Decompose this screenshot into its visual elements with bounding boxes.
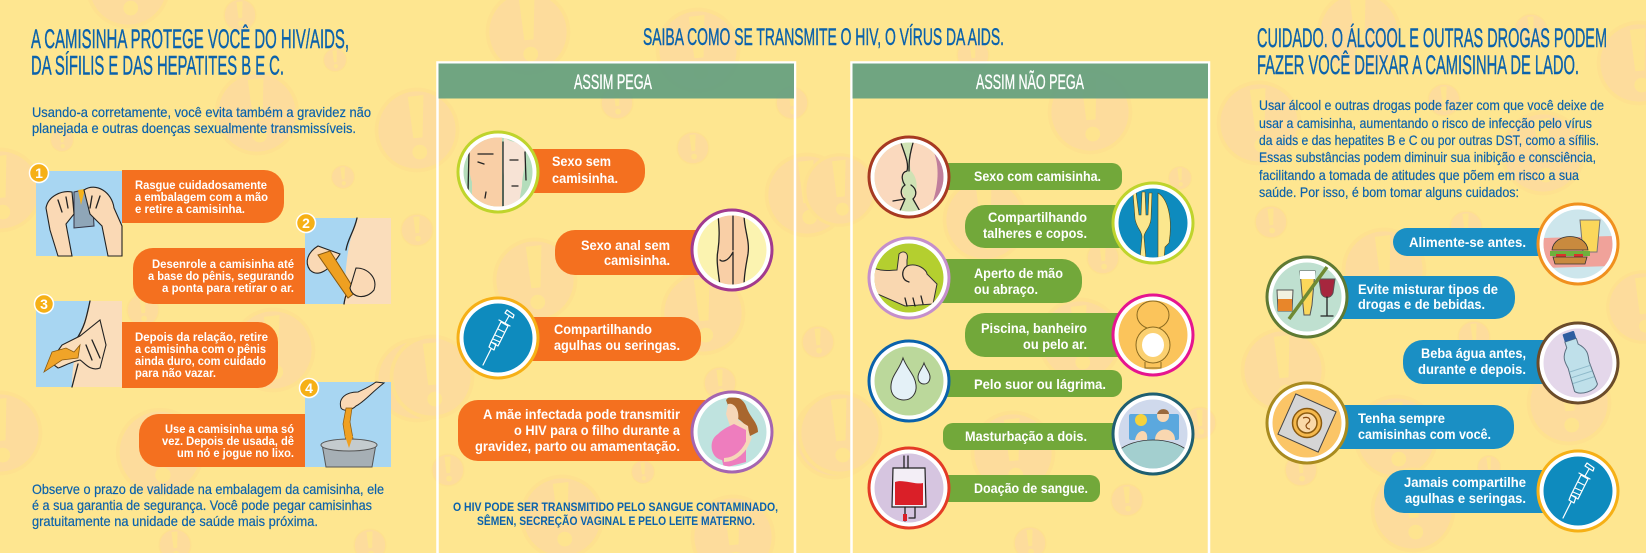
step 4: Use a camisinha uma só [165,422,294,436]
item: sexo sem camisinha: camisinha. [552,170,618,186]
item: agulhas [458,298,701,378]
item: masturbação [943,394,1193,474]
illustration: trash can [305,382,391,467]
step 3: para não vazar. [135,366,216,380]
item: talheres [965,183,1193,263]
item: sexo anal: Sexo anal sem [581,237,670,253]
panel: como usar a camisinha [30,23,391,529]
intro text: Usando-a corretamente, você evita também a gravidez não [32,104,371,120]
item: mãe: gravidez, parto ou amamentação. [475,438,680,454]
header: ASSIM NÃO PEGA [976,70,1084,94]
item: beba água: Beba água antes, [1421,345,1526,361]
icon: bolsa de sangue [869,448,949,528]
panel: cuidados [1257,23,1618,531]
note: sangue, sêmen: SÊMEN, SECREÇÃO VAGINAL E PELO LEITE MATERNO. [477,513,755,528]
item: evite misturar [1267,257,1515,337]
body text [1259,97,1604,200]
item: jamais compartilhe: agulhas e seringas. [1405,490,1526,506]
callout [139,414,305,467]
item: piscina: ou pelo ar. [1023,336,1087,352]
item: aperto de mão: ou abraço. [974,281,1038,297]
item: beba água: durante e depois. [1418,361,1526,377]
illustration: opening the wrapper [36,171,122,256]
center heading: SAIBA COMO SE TRANSMITE O HIV, O VÍRUS DA AIDS. [643,24,1004,51]
intro text: planejada e outras doenças sexualmente transmissíveis. [32,120,356,136]
step 2: a base do pênis, segurando [148,269,294,283]
number 1 [30,164,48,182]
step 3: ainda duro, com cuidado [135,354,266,368]
icon: garrafa de água [1538,323,1618,403]
item: sexo sem camisinha: Sexo sem [552,153,611,169]
number 4 [300,378,318,398]
step 2: a ponta para retirar o ar. [162,281,294,295]
header [438,64,794,98]
closing text [32,481,384,529]
item: evite misturar: drogas e de bebidas. [1358,296,1485,312]
intro text [32,104,371,136]
item: sexo anal: camisinha. [604,252,670,268]
heading: camisinha protege [31,23,349,80]
closing text: Observe o prazo de validade na embalagem da camisinha, ele [32,481,384,497]
icon: garfo e faca [1113,183,1193,263]
panel: assim pega [438,62,795,553]
body text: Usar álcool e outras drogas pode fazer com que você deixe de [1259,97,1604,113]
item: piscina: Piscina, banheiro [981,320,1087,336]
item: sexo sem camisinha [458,132,645,212]
step 1: a embalagem com a mão [135,190,268,204]
item: suor [869,341,1122,421]
number 3: 3 [40,296,48,312]
item: alimente-se: Alimente-se antes. [1409,234,1526,250]
heading: camisinha protege: A CAMISINHA PROTEGE VOCÊ DO HIV/AIDS, [31,23,349,54]
item: suor: Pelo suor ou lágrima. [974,376,1106,392]
step 2 [133,214,391,304]
item: aperto de mão [869,238,1082,318]
closing text: gratuitamente na unidade de saúde mais próxima. [32,513,318,529]
body text: usar a camisinha, aumentando o risco de infecção pelo vírus [1259,115,1592,131]
body text: da aids e das hepatites B e C ou por outras DST, como a sífilis. [1259,132,1599,148]
icon: seringa [458,298,538,378]
item: sexo anal [555,210,772,290]
note: sangue, sêmen [453,500,778,528]
icon: bebidas proibidas [1267,257,1347,337]
step 2: Desenrole a camisinha até [152,257,294,271]
item: tenha sempre camisinhas: camisinhas com você. [1358,426,1491,442]
item: piscina [965,295,1193,375]
closing text: é a sua garantia de segurança. Você pode pegar camisinhas [32,497,372,513]
item: sexo com camisinha [869,137,1122,217]
icon: lanche e suco [1538,204,1618,284]
item: alimente-se [1393,204,1618,284]
heading: álcool e drogas [1257,23,1607,80]
icon: gestante [692,392,772,472]
illustration: removing [36,301,122,387]
item: masturbação: Masturbação a dois. [965,428,1087,444]
note: sangue, sêmen: O HIV PODE SER TRANSMITIDO PELO SANGUE CONTAMINADO, [453,500,778,514]
item: mãe [458,392,772,472]
step 4: um nó e jogue no lixo. [177,446,294,460]
icon: beijo [869,137,949,217]
step 4: vez. Depois de usada, dê [162,434,294,448]
item: doação de sangue: Doação de sangue. [974,480,1088,496]
icon: casal na cama [1113,394,1193,474]
step 3: Depois da relação, retire [135,330,268,344]
item: mãe: A mãe infectada pode transmitir [483,406,681,422]
number 2: 2 [302,215,310,231]
icon: vaso sanitário [1113,295,1193,375]
icon: gotas [869,341,949,421]
icon: embalagem de camisinha [1267,383,1347,463]
step 1: Rasgue cuidadosamente [135,178,267,192]
callout [122,170,284,223]
item: doação de sangue [869,448,1100,528]
body text: saúde. Por isso, é bom tomar alguns cuidados: [1259,184,1519,200]
item: sexo com camisinha: Sexo com camisinha. [974,168,1101,184]
illustration: unrolling [305,218,391,304]
item: jamais compartilhe: Jamais compartilhe [1404,474,1526,490]
item: tenha sempre camisinhas: Tenha sempre [1358,410,1445,426]
callout [133,248,305,304]
body text: Essas substâncias podem diminuir sua inibição e consciência, [1259,149,1596,165]
item: talheres: Compartilhando [988,209,1087,225]
step 3 [34,294,278,388]
item: agulhas: agulhas ou seringas. [554,337,680,353]
item: evite misturar: Evite misturar tipos de [1358,281,1498,297]
step 1: e retire a camisinha. [135,202,245,216]
step 1 [30,164,284,256]
item: jamais compartilhe [1384,451,1618,531]
item: mãe: o HIV para o filho durante a [514,422,680,438]
step 3: a camisinha com o pênis [135,342,266,356]
icon: costas [692,210,772,290]
number 3 [34,294,54,314]
body text: facilitando a tomada de atitudes que põem em risco a sua [1259,167,1579,183]
number 1: 1 [35,165,43,181]
item: beba água [1403,323,1618,403]
number 2 [296,214,316,232]
item: talheres: talheres e copos. [983,225,1087,241]
number 4: 4 [305,380,313,396]
panel: assim não pega [852,62,1209,553]
item: agulhas: Compartilhando [554,321,652,337]
icon: corpos [458,132,538,212]
header [852,64,1208,98]
icon: aperto de mão [869,238,949,318]
step 4 [139,378,391,467]
heading: camisinha protege: DA SÍFILIS E DAS HEPATITES B E C. [31,50,284,80]
item: tenha sempre camisinhas [1267,383,1514,463]
header: ASSIM PEGA [574,71,652,94]
item: aperto de mão: Aperto de mão [974,265,1063,281]
callout [122,322,278,388]
icon: seringa [1538,451,1618,531]
